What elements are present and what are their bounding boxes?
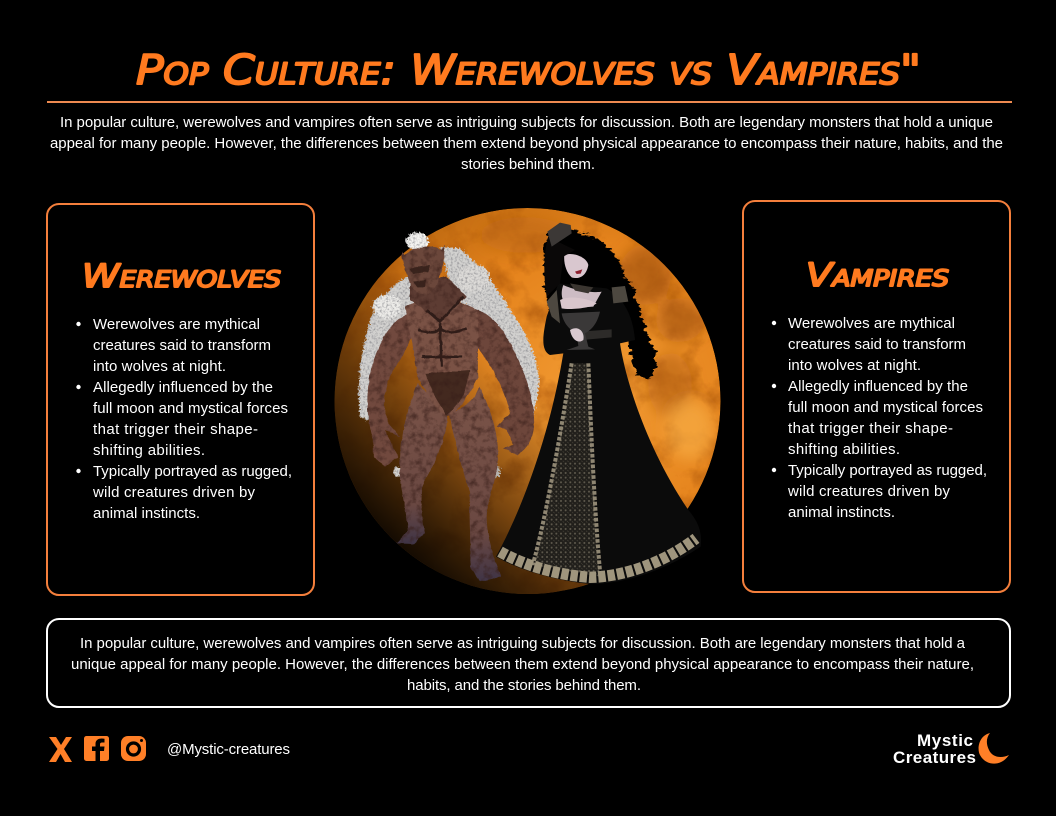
panel: summary callout bbox=[47, 619, 1010, 707]
werewolf figure bbox=[359, 233, 539, 582]
icon: X social bbox=[49, 737, 72, 762]
dress hem trim bbox=[500, 538, 696, 577]
vampires bullet list: shifting abilities. bbox=[788, 441, 900, 458]
social handle: @Mystic-creatures bbox=[167, 741, 290, 758]
illustration: moon with werewolf and vampire bbox=[334, 208, 722, 594]
vampires bullet list: full moon and mystical forces bbox=[788, 399, 983, 416]
panel: werewolves bbox=[47, 204, 314, 595]
vampires bullet list: Allegedly influenced by the bbox=[788, 378, 968, 395]
icon: Instagram bbox=[121, 736, 146, 761]
vampires bullet list: animal instincts. bbox=[788, 504, 895, 521]
werewolves bullet list bbox=[76, 316, 292, 522]
vampires bullet list: creatures said to transform bbox=[788, 336, 966, 353]
logo: Mystic Creatures bbox=[893, 731, 1009, 767]
vampires bullet list bbox=[772, 315, 987, 521]
dress lace panel bbox=[533, 363, 600, 577]
vampire figure bbox=[496, 223, 701, 584]
intro text: stories behind them. bbox=[461, 156, 595, 173]
panel: summary callout: In popular culture, werewolves and vampires often serve as intriguing subjects for discussion. Both are legendary monsters that hold a bbox=[80, 635, 966, 652]
werewolves bullet list: into wolves at night. bbox=[93, 358, 226, 375]
full orange moon bbox=[334, 208, 722, 594]
werewolves bullet list: Werewolves are mythical bbox=[93, 316, 260, 333]
panel: summary callout: unique appeal for many people. However, the differences between them extend beyond physical appearance to encompass their nature, bbox=[71, 656, 974, 673]
panel: vampires bbox=[743, 201, 1010, 592]
werewolves bullet list: full moon and mystical forces bbox=[93, 400, 288, 417]
werewolves bullet list: Typically portrayed as rugged, bbox=[93, 463, 292, 480]
vampires bullet list: Typically portrayed as rugged, bbox=[788, 462, 987, 479]
vampires bullet list: Werewolves are mythical bbox=[788, 315, 955, 332]
intro text: appeal for many people. However, the differences between them extend beyond physical appearance to encompass their nature, habits, and the bbox=[50, 135, 1003, 152]
werewolves bullet list: that trigger their shape- bbox=[93, 421, 258, 438]
intro text: In popular culture, werewolves and vampires often serve as intriguing subjects for discussion. Both are legendary monsters that hold a unique bbox=[60, 114, 993, 131]
logo: Mystic Creatures: Creatures bbox=[893, 748, 976, 767]
title: Pop Culture: Werewolves vs Vampires" bbox=[136, 46, 921, 94]
werewolves bullet list: Allegedly influenced by the bbox=[93, 379, 273, 396]
intro text bbox=[50, 114, 1003, 173]
logo: Mystic Creatures: Mystic bbox=[917, 731, 973, 750]
werewolves bullet list: animal instincts. bbox=[93, 505, 200, 522]
werewolves bullet list: creatures said to transform bbox=[93, 337, 271, 354]
heading: werewolves: Werewolves bbox=[82, 257, 281, 295]
panel: summary callout: habits, and the stories behind them. bbox=[407, 677, 641, 694]
vampires bullet list: that trigger their shape- bbox=[788, 420, 953, 437]
icon: crescent moon bbox=[979, 733, 1009, 764]
vampires bullet list: wild creatures driven by bbox=[787, 483, 950, 500]
icon: Facebook bbox=[84, 736, 109, 761]
vampires bullet list: into wolves at night. bbox=[788, 357, 921, 374]
bodice and skin bbox=[562, 285, 602, 308]
werewolves bullet list: shifting abilities. bbox=[93, 442, 205, 459]
werewolves bullet list: wild creatures driven by bbox=[92, 484, 256, 501]
heading: vampires: Vampires bbox=[806, 256, 949, 294]
